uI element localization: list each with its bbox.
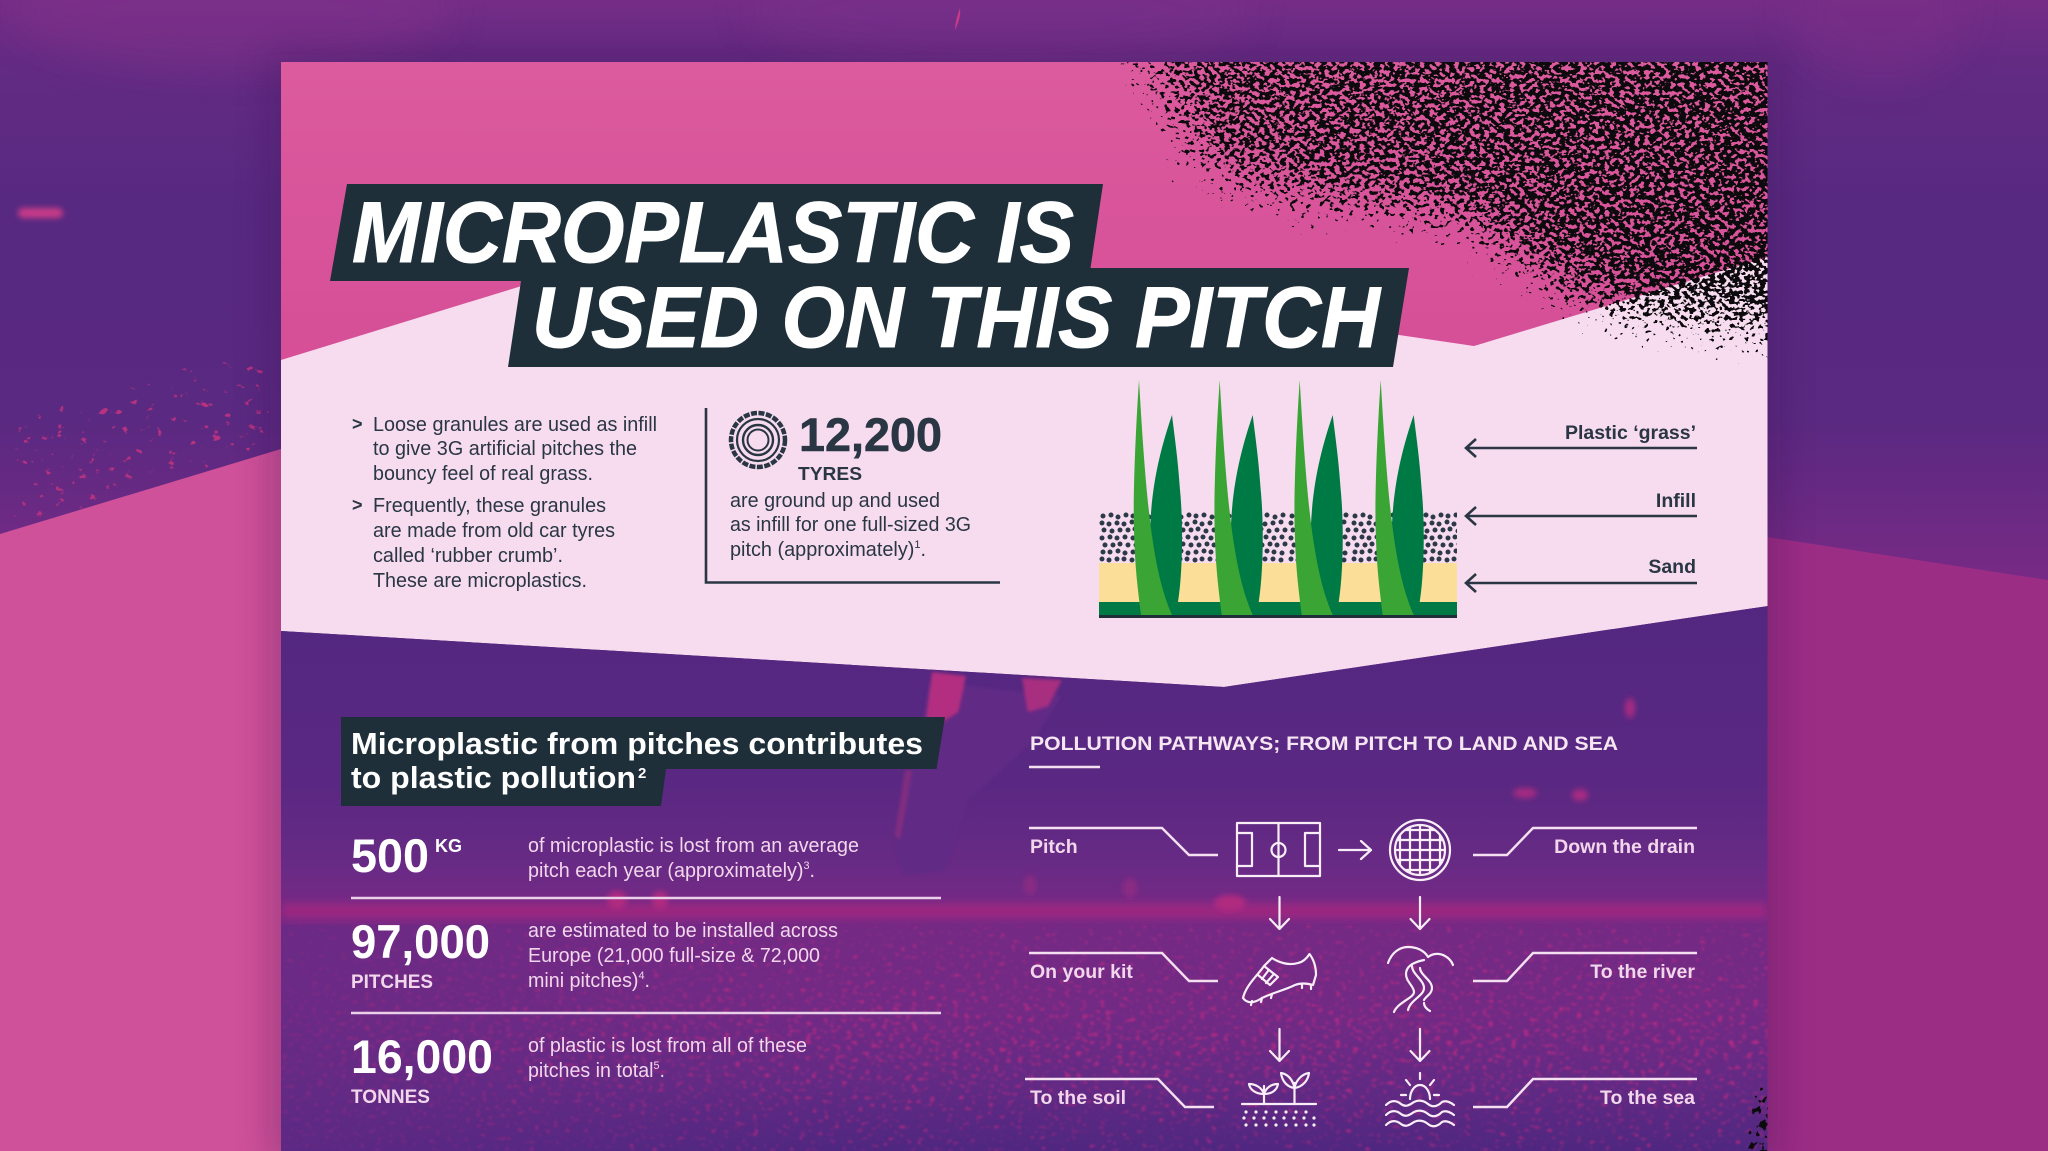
title: [330, 184, 1409, 367]
stat description: as infill for one full-sized 3G: [730, 514, 971, 536]
stat: 500 kg: of microplastic is lost from an average: [528, 835, 859, 857]
arrow: pitch to kit: [1270, 897, 1289, 929]
pathway labels with connector lines: Down the drain: [1554, 836, 1695, 858]
stat description: [730, 490, 971, 561]
pathway labels with connector lines: [1025, 828, 1697, 1109]
arrow: kit to soil: [1270, 1029, 1289, 1061]
background: upper purple field: [0, 0, 2048, 600]
turf diagram: [1099, 380, 1457, 618]
icon: tyre: [731, 413, 785, 467]
stat description: are ground up and used: [730, 490, 940, 512]
panel shadow: [270, 55, 1780, 1151]
arrow: drain to river: [1410, 897, 1430, 929]
photo: bokeh lights: [607, 698, 1635, 911]
infill layer: [1099, 512, 1457, 563]
main panel: [281, 62, 1768, 1151]
pathway labels with connector lines: On your kit: [1030, 961, 1133, 983]
stat: 500 kg: .: [810, 860, 815, 882]
heading: pollution pathways: POLLUTION PATHWAYS; FROM PITCH TO LAND AND SEA: [1030, 733, 1618, 755]
heading: plastic pollution: 2: [638, 765, 646, 782]
stat: 16,000 tonnes: 5: [654, 1060, 660, 1072]
arrow: pitch to drain: [1339, 841, 1371, 859]
sand layer: [1099, 563, 1457, 602]
text block: granule explanation: [352, 414, 657, 592]
heading: plastic pollution: to plastic pollution: [351, 760, 636, 795]
photo: grass speckle: [281, 925, 1768, 1151]
stat description: pitch (approximately): [730, 539, 916, 561]
stat: 500 kg: KG: [435, 836, 462, 856]
black granule spray, top right: [1120, 62, 1768, 364]
photo: player leg: [895, 672, 1062, 875]
icon: drain: [1390, 820, 1450, 880]
stat: 97,000 pitches: [351, 915, 838, 993]
icon: football boot: [1243, 954, 1316, 1005]
stat: 16,000 tonnes: pitches in total: [528, 1060, 656, 1082]
title line 2: USED ON THIS PITCH: [532, 270, 1382, 366]
pathway labels with connector lines: To the soil: [1030, 1087, 1126, 1109]
black granule spray, bottom right: [1748, 1088, 1768, 1151]
panel: photo of pitch: [281, 606, 1768, 1151]
background: blurred pink bar and specks: [0, 8, 960, 545]
stat: 97,000 pitches: PITCHES: [351, 972, 433, 993]
background: top-edge tonal variation: [10, 0, 1970, 80]
stat: 97,000 pitches: 4: [638, 970, 645, 982]
stat: 16,000 tonnes: .: [660, 1060, 665, 1082]
stat: 97,000 pitches: Europe (21,000 full-size & 72,000: [528, 945, 820, 967]
text block: granule explanation: >: [352, 414, 363, 434]
text block: granule explanation: Frequently, these granules: [373, 495, 606, 517]
turf labels and arrows: Sand: [1648, 556, 1696, 578]
text block: granule explanation: These are microplastics.: [373, 570, 587, 592]
pathway labels with connector lines: To the sea: [1600, 1087, 1695, 1109]
text block: granule explanation: are made from old car tyres: [373, 520, 615, 542]
turf labels and arrows: [1466, 422, 1697, 592]
stat: 16,000 tonnes: TONNES: [351, 1087, 430, 1108]
title line 1: MICROPLASTIC IS: [352, 185, 1074, 281]
icon: football pitch: [1237, 823, 1320, 876]
stat number: 12,200: [799, 408, 942, 461]
stat unit: TYRES: [798, 463, 862, 484]
text block: granule explanation: >: [352, 495, 363, 515]
text block: granule explanation: called ‘rubber crumb’.: [373, 545, 563, 567]
text block: granule explanation: to give 3G artificial pitches the: [373, 438, 637, 460]
stat: 500 kg: pitch each year (approximately): [528, 860, 807, 882]
text block: granule explanation: Loose granules are used as infill: [373, 414, 657, 436]
stat: 97,000 pitches: are estimated to be installed across: [528, 920, 838, 942]
grass blades: [1134, 380, 1424, 615]
turf labels and arrows: Infill: [1656, 490, 1696, 512]
stat: 16,000 tonnes: [351, 1030, 807, 1108]
stat: 500 kg: 3: [803, 860, 810, 872]
pathway labels with connector lines: Pitch: [1030, 836, 1078, 858]
text block: granule explanation: bouncy feel of real grass.: [373, 463, 593, 485]
heading: plastic pollution: Microplastic from pitches contributes: [351, 726, 923, 761]
background: left pink wedge: [0, 449, 281, 1151]
arrow: river to sea: [1410, 1029, 1430, 1061]
stat description: .: [920, 539, 926, 561]
pathway labels with connector lines: To the river: [1590, 961, 1695, 983]
stat: 500 kg: [351, 829, 859, 882]
icon: river: [1388, 947, 1453, 1012]
stat: 97,000 pitches: .: [645, 970, 650, 992]
stat: 16,000 tonnes: of plastic is lost from all of these: [528, 1035, 807, 1057]
photo: calmer left side: [281, 925, 702, 1151]
stat: 97,000 pitches: 97,000: [351, 915, 490, 968]
title banner: [330, 184, 1409, 367]
stat description: 1: [914, 539, 920, 551]
heading: plastic pollution: [341, 717, 945, 806]
panel: pink title field: [281, 62, 1768, 382]
icon: seedlings in soil: [1242, 1073, 1316, 1125]
stat: 500 kg: 500: [351, 829, 429, 882]
turf labels and arrows: Plastic ‘grass’: [1565, 422, 1696, 444]
backing layer: [1099, 602, 1457, 615]
background: right magenta wedge: [1767, 537, 2048, 1151]
stat: 97,000 pitches: mini pitches): [528, 970, 640, 992]
photo: pitch horizon glow: [281, 904, 1768, 918]
icon: sun over the sea: [1386, 1073, 1454, 1126]
panel: pale information band: [281, 232, 1768, 687]
stat: 16,000 tonnes: 16,000: [351, 1030, 493, 1083]
stat: tyres: [706, 408, 1000, 582]
